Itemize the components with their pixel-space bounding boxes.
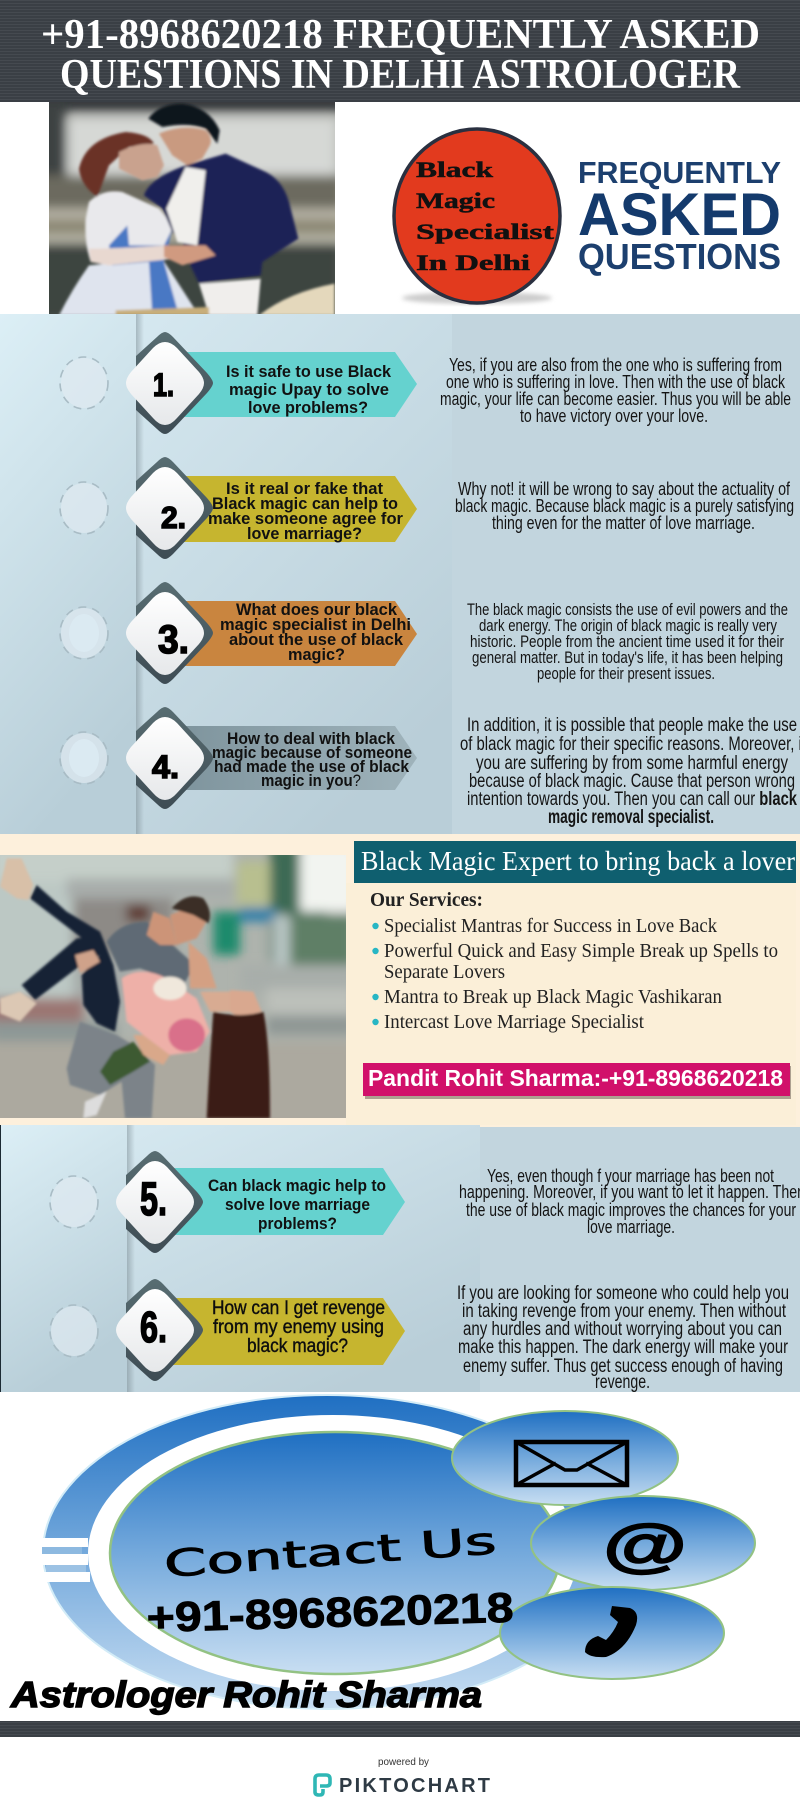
question 1: 1. [153,367,174,403]
answer 2 [455,479,794,533]
services banner [354,841,796,883]
answer 3: people for their present issues. [537,665,715,683]
logo: black magic specialist red circle: Magic [416,188,495,213]
icon: piktochart mark [315,1775,330,1795]
services list: Intercast Love Marriage Specialist [384,1011,644,1033]
question 4: 4. [152,749,179,785]
piktochart logo: PIKTOCHART [339,1775,490,1797]
question 1: love problems? [248,398,368,417]
photo: man carrying woman with roses [0,845,357,1128]
title [41,12,760,98]
panel: services advert [0,834,800,1128]
answer 1: to have victory over your love. [520,406,708,426]
question 2: love marriage? [247,524,362,543]
header banner [0,0,800,102]
question 5: problems? [258,1214,337,1233]
question 5: solve love marriage [225,1195,370,1214]
question 4 [126,707,417,809]
powered by: powered by [378,1756,430,1768]
answer 3 [467,601,788,683]
question 6: How can I get revenge [212,1298,385,1319]
at-sign bubble: @ [603,1513,687,1578]
footer bar [0,1721,800,1737]
services list: Mantra to Break up Black Magic Vashikaran [384,986,722,1008]
question 4: magic because of someone [212,743,412,762]
question 6: 6. [140,1303,167,1352]
astrologer name: Astrologer Rohit Sharma [10,1674,482,1715]
outer ring [40,1395,611,1709]
question 2: Black magic can help to [212,494,398,513]
question 3: 3. [158,618,189,662]
question 3: magic? [288,645,345,664]
answer 1 [440,355,791,426]
question 3: magic specialist in Delhi [220,615,411,634]
contact us text: Contact Us [163,1519,498,1586]
question 4: How to deal with black [227,729,395,748]
services banner: Black Magic Expert to bring back a lover [361,846,795,876]
services list [370,889,778,1033]
answer 6 [457,1283,789,1393]
logo: black magic specialist red circle: In Delhi [416,250,530,275]
logo: black magic specialist red circle [394,129,560,304]
answer 6: revenge. [595,1372,650,1393]
question 2: 2. [161,500,186,535]
panel: questions 1 to 4 [0,314,800,834]
phone button: Pandit Rohit Sharma:-+91-8968620218 [368,1065,783,1091]
mail bubble [452,1411,678,1505]
services list: Specialist Mantras for Success in Love Back [384,915,717,937]
dashed circles [60,357,108,784]
logo: black magic specialist red circle: Specialist [416,219,555,244]
answer 4 [460,715,800,828]
question 4: magic in you? [261,771,361,790]
services list: Separate Lovers [384,961,505,983]
phone number: +91-8968620218 [146,1584,514,1641]
question 2 [126,457,417,559]
frequently asked questions wordmark: ASKED [578,181,781,248]
question 5: 5. [140,1172,167,1225]
title: +91-8968620218 FREQUENTLY ASKED [41,12,760,58]
answer 4: magic removal specialist. [548,807,714,828]
panel: questions 5 and 6 [0,1125,800,1393]
frequently asked questions wordmark: FREQUENTLY [578,155,781,190]
title: QUESTIONS IN DELHI ASTROLOGER [60,52,741,98]
question 4: had made the use of black [214,757,409,776]
phone bubble [500,1587,724,1679]
question 5 [116,1151,405,1253]
frequently asked questions wordmark: QUESTIONS [578,236,781,277]
question 3 [126,582,417,684]
frequently asked questions wordmark [578,155,781,277]
answer 5: love marriage. [587,1217,675,1237]
question 6: from my enemy using [213,1317,384,1338]
services list: Our Services: [370,889,483,911]
question 6: black magic? [247,1336,348,1357]
question 2: Is it real or fake that [226,479,383,498]
answer 5 [459,1166,800,1237]
question 6 [116,1279,405,1381]
question 1 [126,332,417,434]
question 1: Is it safe to use Black [226,362,392,381]
question 5: Can black magic help to [208,1176,386,1195]
at-sign bubble [531,1496,755,1590]
inner disc [110,1432,560,1674]
question 3: about the use of black [229,630,404,649]
services list: Powerful Quick and Easy Simple Break up Spells to [384,940,778,962]
question 2: make someone agree for [208,509,403,528]
question 3: What does our black [236,600,398,619]
logo: black magic specialist red circle: Black [416,157,494,182]
question 1: magic Upay to solve [229,380,389,399]
photo: couple embracing [49,102,335,314]
dashed circles [50,1176,98,1357]
contact us graphic [40,1395,755,1709]
